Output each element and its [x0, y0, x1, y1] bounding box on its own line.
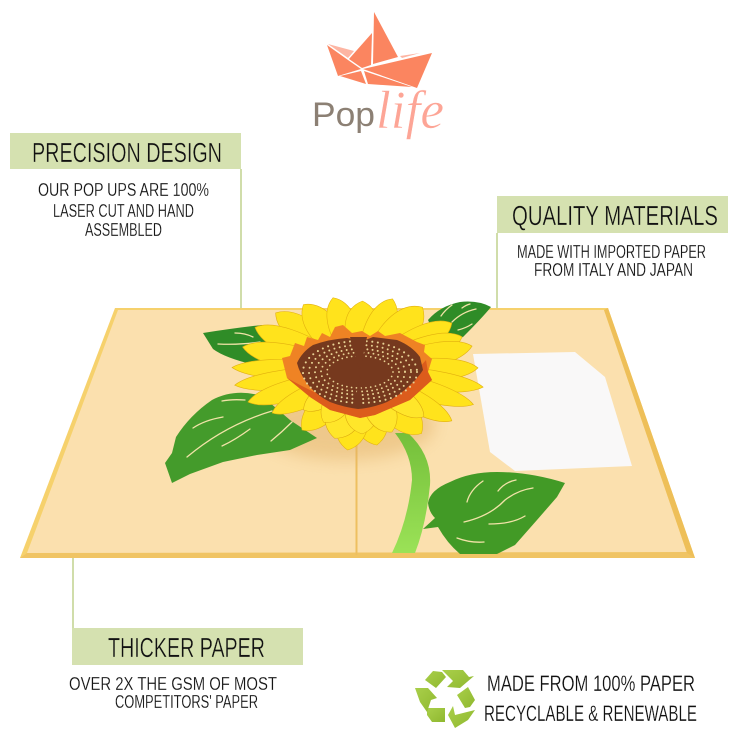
text: recycled paper note — [484, 671, 697, 726]
icon: paper boat — [327, 12, 432, 88]
sunflower — [232, 293, 484, 453]
leaf: large left — [165, 393, 317, 483]
panel: thicker paper — [69, 628, 303, 712]
heading: PRECISION DESIGN — [32, 137, 222, 168]
logo: Poplife paper boat — [312, 12, 444, 140]
pop-up card illustration — [20, 293, 695, 558]
note card — [473, 352, 632, 471]
petals — [232, 293, 484, 453]
panel: precision design — [10, 133, 241, 240]
callout line: thicker paper — [72, 558, 74, 628]
logo word: Pop: Pop — [312, 96, 375, 134]
heading: THICKER PAPER — [108, 632, 265, 663]
leaf: upper left — [203, 325, 285, 365]
card inner face — [27, 310, 687, 553]
seed head seam top — [350, 337, 367, 371]
card bottom edge — [20, 552, 695, 558]
body text: FROM ITALY AND JAPAN — [534, 260, 693, 280]
seed head seam bottom — [354, 375, 362, 408]
body text: OUR POP UPS ARE 100% — [38, 180, 209, 200]
body text: COMPETITORS' PAPER — [115, 692, 258, 712]
brown seed head — [297, 337, 423, 409]
heading band — [10, 133, 241, 169]
stem — [392, 433, 430, 553]
leaf: upper right — [428, 302, 491, 345]
heading band — [497, 196, 728, 233]
card right edge — [604, 308, 695, 558]
body text: ASSEMBLED — [85, 220, 162, 240]
body text — [69, 674, 277, 712]
body text — [517, 242, 706, 280]
icon: recycle symbol — [415, 670, 475, 728]
body text: OVER 2X THE GSM OF MOST — [69, 674, 277, 694]
body text — [38, 180, 209, 240]
centre fold — [356, 445, 358, 555]
seed dots — [303, 341, 417, 403]
callout line: precision design — [240, 169, 242, 309]
flower shadow — [255, 390, 435, 460]
card base — [20, 308, 695, 558]
logo word: life: life — [376, 80, 444, 140]
body text: LASER CUT AND HAND — [53, 201, 194, 221]
orange ruff shadow side — [287, 360, 432, 418]
text: recycled paper note: MADE FROM 100% PAPER — [487, 671, 695, 696]
panel: quality materials — [497, 196, 728, 280]
orange ruff — [282, 325, 432, 418]
heading band — [72, 628, 303, 665]
callout line: quality materials — [496, 233, 498, 310]
leaf: lower right — [423, 472, 565, 554]
